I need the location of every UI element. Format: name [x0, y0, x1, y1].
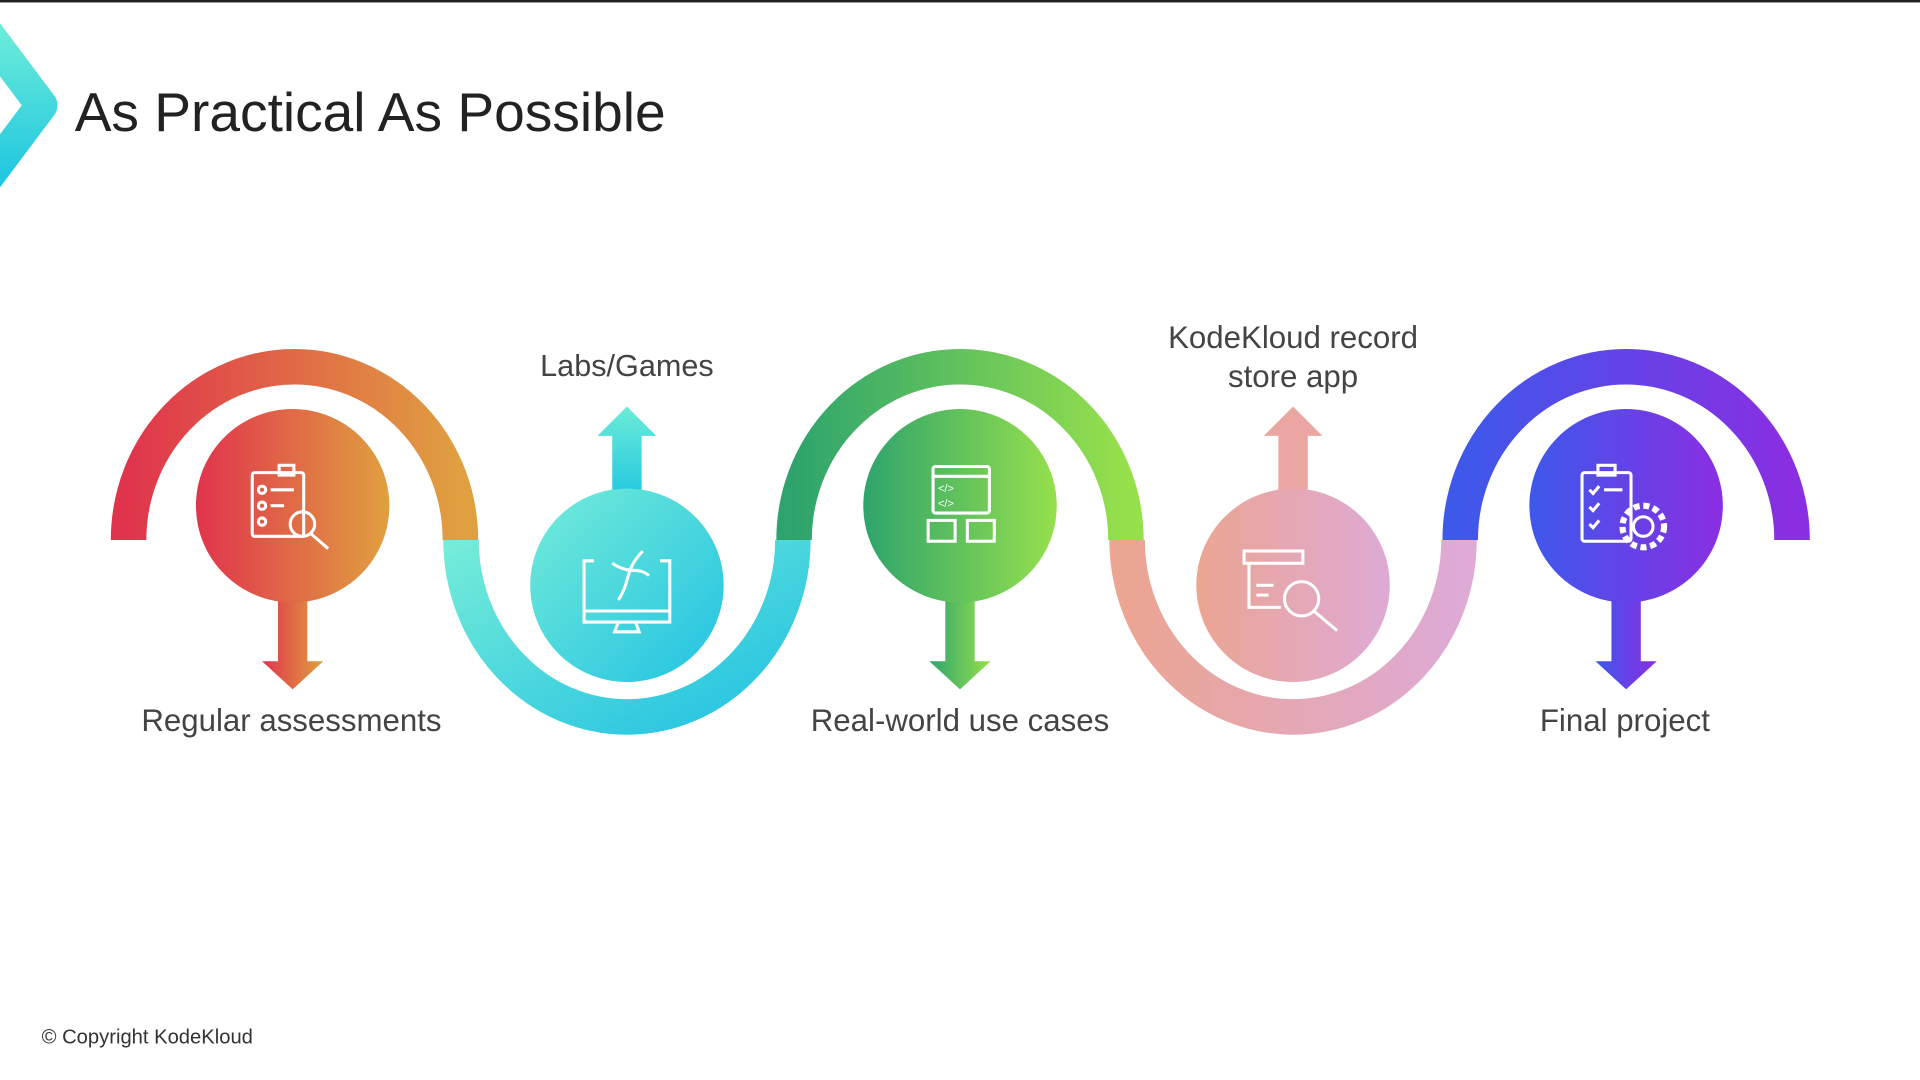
- step 2: Labs/Games: [530, 349, 724, 682]
- arc 2: [461, 540, 793, 717]
- step 4: KodeKloud record store app: store app: [1228, 359, 1358, 394]
- step 4: KodeKloud record store app: [1168, 320, 1418, 682]
- step 3: Real-world use cases: </>: [938, 483, 954, 495]
- step 1: Regular assessments: [141, 409, 442, 738]
- arc 3: [794, 367, 1126, 540]
- step 3: Real-world use cases: [811, 409, 1109, 738]
- step 2: Labs/Games: Labs/Games: [540, 349, 714, 383]
- step 3: Real-world use cases: </>: [938, 498, 954, 510]
- step 5: Final project: [1529, 409, 1723, 738]
- logo chevron: [0, 27, 42, 184]
- arc 5: [1460, 367, 1792, 540]
- step 3: Real-world use cases: Real-world use cases: [811, 703, 1109, 738]
- step 4: KodeKloud record store app: KodeKloud record: [1168, 320, 1418, 355]
- title: As Practical As Possible: [75, 81, 666, 143]
- arc 1: [129, 367, 460, 540]
- arc 4: [1127, 540, 1459, 717]
- copyright: © Copyright KodeKloud: [42, 1026, 253, 1048]
- step 5: Final project: Final project: [1540, 703, 1710, 738]
- step 1: Regular assessments: Regular assessments: [141, 703, 442, 738]
- top border: [0, 0, 1920, 2]
